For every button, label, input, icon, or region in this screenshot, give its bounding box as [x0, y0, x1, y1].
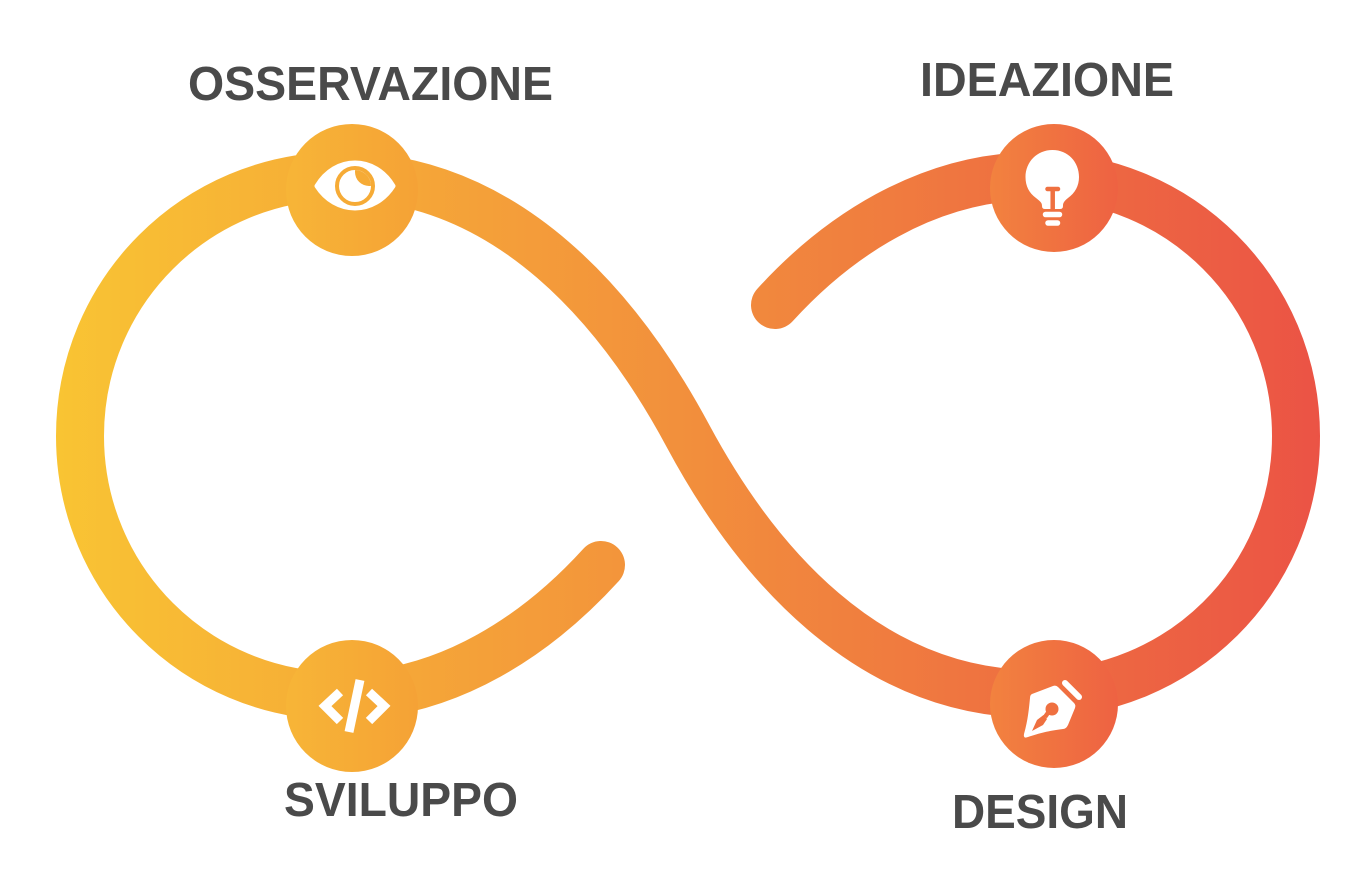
- infinity loop band: [80, 176, 1296, 696]
- icon: code brackets: [325, 680, 384, 732]
- heading: ideazione: IDEAZIONE: [920, 54, 1174, 107]
- icon: light bulb: [1026, 150, 1079, 223]
- icon: eye: [317, 158, 393, 208]
- node: osservazione: [286, 124, 418, 256]
- heading: osservazione: OSSERVAZIONE: [188, 58, 553, 111]
- infinity cycle infographic: [56, 62, 1320, 828]
- node: design: [990, 640, 1118, 768]
- heading: design: DESIGN: [952, 786, 1128, 839]
- heading: sviluppo: SVILUPPO: [284, 774, 518, 827]
- icon: pen nib: [1024, 683, 1079, 738]
- node: sviluppo: [286, 640, 418, 772]
- node: ideazione: [990, 124, 1118, 252]
